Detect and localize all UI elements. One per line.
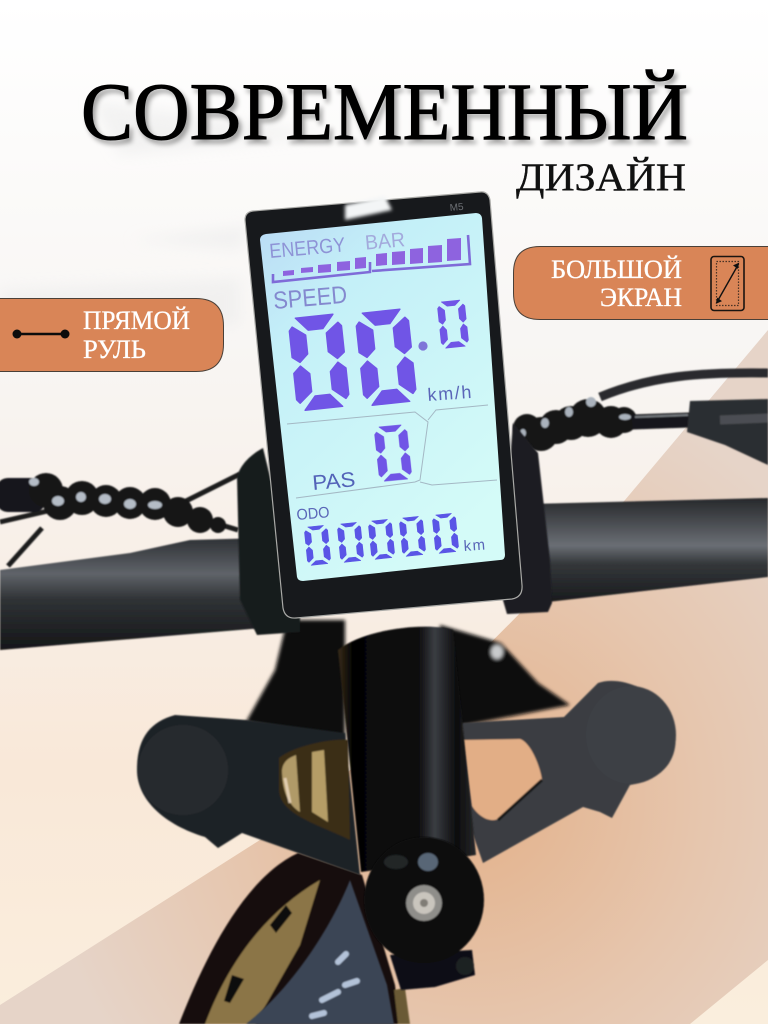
speed unit: km/h: [427, 382, 474, 405]
assist level label: PAS: [311, 468, 356, 495]
model mark: M5: [449, 202, 465, 214]
brake assembly behind stem: [246, 620, 570, 740]
icon: screen diagonal: [711, 256, 744, 310]
handlebar: [0, 498, 768, 650]
pill text: ПРЯМОЙ: [83, 305, 190, 335]
panel: big screen: [514, 246, 768, 320]
left cable: [0, 473, 240, 566]
pill text: БОЛЬШОЙ: [551, 254, 682, 284]
speed digits: [288, 300, 469, 411]
odometer unit: km: [463, 536, 487, 555]
pill text: [551, 254, 682, 312]
pill text: [83, 305, 190, 364]
front fender: [179, 853, 410, 1024]
pill text: ЭКРАН: [600, 282, 682, 312]
panel: straight handlebar: [0, 298, 224, 372]
title: СОВРЕМЕННЫЙ: [81, 66, 688, 157]
icon: handlebar line: [12, 330, 70, 338]
odometer digits: [304, 513, 459, 566]
pill background: [0, 298, 224, 372]
right lever arm: [462, 681, 676, 863]
left lever arm: [137, 715, 360, 875]
pill background: [514, 246, 768, 320]
energy bar: [273, 235, 470, 282]
energy label: ENERGY: [268, 233, 346, 263]
screen: [260, 213, 505, 581]
handlebar stem: [338, 627, 476, 872]
display casing: [245, 192, 522, 618]
glare: [345, 196, 392, 220]
tire: [246, 880, 394, 1024]
speed label: SPEED: [272, 282, 348, 315]
assist digit: [374, 425, 412, 481]
energy label: [268, 228, 406, 263]
odometer label: ODO: [296, 504, 330, 524]
display: [245, 192, 522, 618]
right cable: [513, 373, 768, 465]
subtitle: ДИЗАЙН: [516, 156, 686, 199]
stem end cap and bolt: [364, 837, 484, 990]
pill text: РУЛЬ: [83, 334, 146, 364]
display mount: [237, 423, 552, 635]
dividers: [287, 405, 497, 498]
energy label: BAR: [364, 228, 406, 255]
